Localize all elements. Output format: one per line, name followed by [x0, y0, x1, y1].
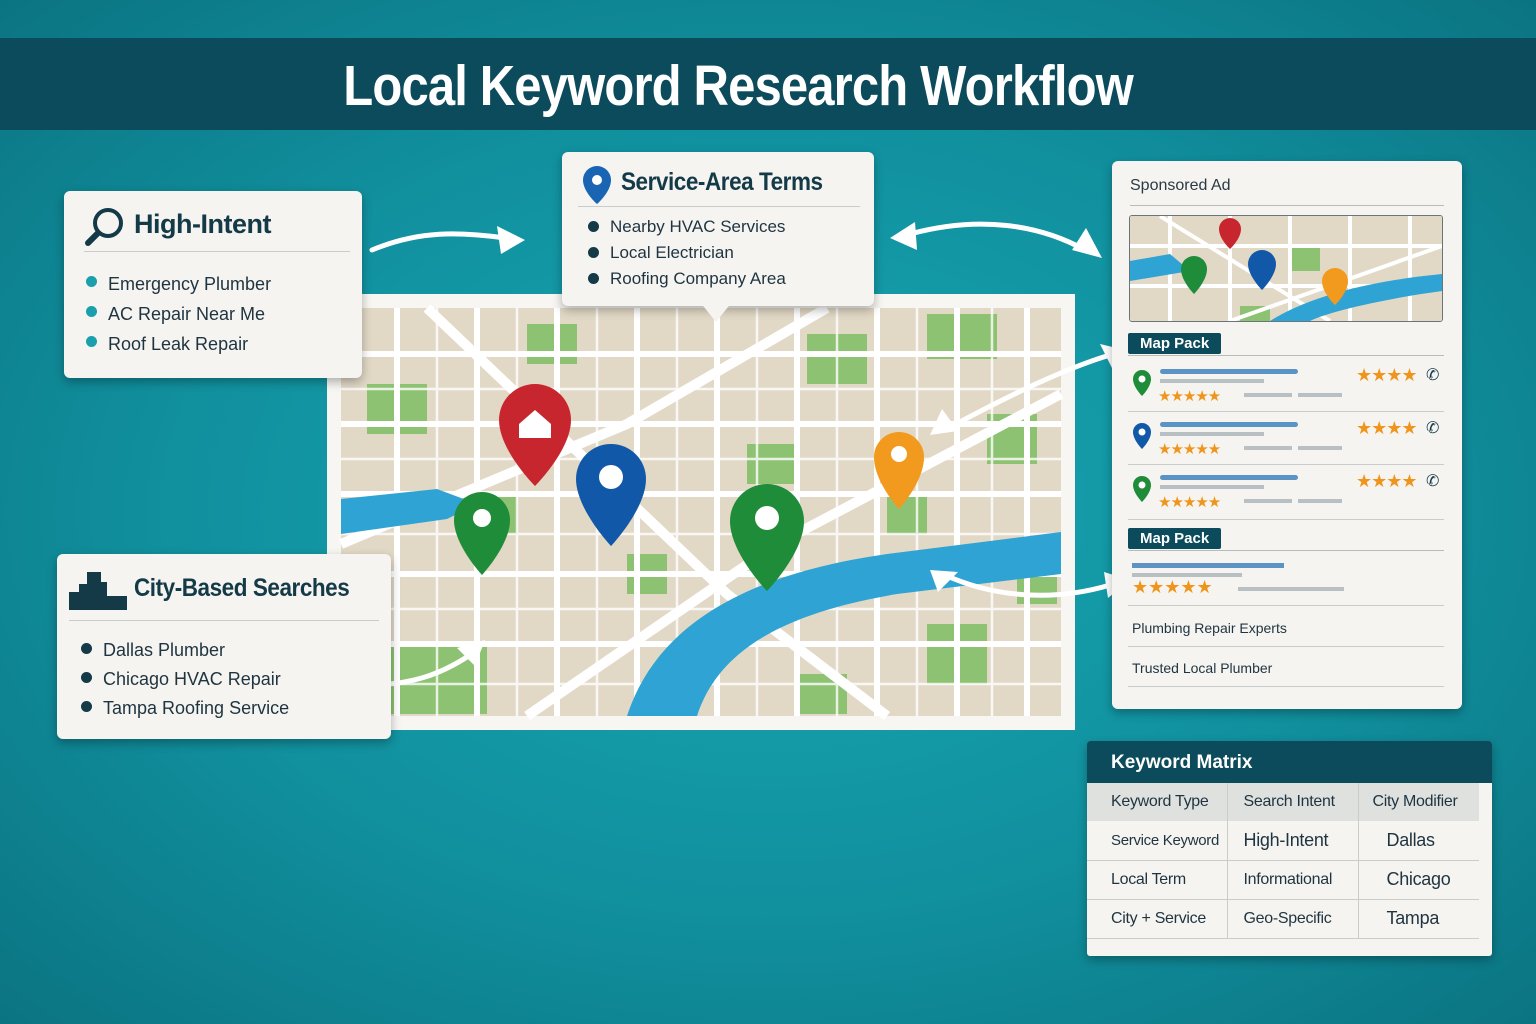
table: keyword matrix: Local Term [1111, 870, 1186, 888]
table: keyword matrix: Dallas [1386, 830, 1435, 850]
panel: sponsored ad SERP: ✆ [1426, 473, 1438, 490]
map pack 2: Map Pack [1140, 530, 1209, 547]
panel: high-intent: AC Repair Near Me [108, 304, 265, 324]
panel: high-intent: Emergency Plumber [108, 274, 271, 294]
panel: sponsored ad SERP: ★★★★★ [1158, 388, 1220, 405]
table: keyword matrix: City + Service [1111, 910, 1206, 926]
table: keyword matrix: Tampa [1386, 908, 1439, 928]
panel: sponsored ad SERP: ★★★★★ [1132, 577, 1213, 597]
panel: sponsored ad SERP: Plumbing Repair Experts [1132, 620, 1287, 636]
panel: high-intent: Roof Leak Repair [108, 334, 248, 354]
table: keyword matrix: City Modifier [1372, 793, 1458, 810]
panel: city-based searches: Dallas Plumber [103, 640, 225, 660]
panel: service-area terms: Local Electrician [610, 243, 734, 262]
table: keyword matrix: High-Intent [1244, 830, 1328, 850]
panel: city-based searches: Chicago HVAC Repair [103, 669, 281, 689]
panel: sponsored ad SERP: ★★★★ [1356, 365, 1417, 385]
panel: sponsored ad SERP: ✆ [1426, 420, 1438, 437]
map pack 1 [1128, 333, 1444, 356]
panel: service-area terms: Roofing Company Area [610, 269, 786, 288]
panel: sponsored ad SERP: ★★★★★ [1158, 494, 1220, 511]
mini map [1129, 215, 1443, 322]
table: keyword matrix: Search Intent [1244, 793, 1335, 810]
panel: sponsored ad SERP: Sponsored Ad [1130, 177, 1231, 194]
panel: sponsored ad SERP: ★★★★ [1356, 418, 1417, 438]
panel: sponsored ad SERP: ★★★★ [1356, 471, 1417, 491]
table: keyword matrix: Informational [1244, 870, 1332, 888]
panel: sponsored ad SERP: Trusted Local Plumber [1132, 660, 1272, 676]
map pack 1: Map Pack [1140, 335, 1209, 352]
panel: sponsored ad SERP: ✆ [1426, 367, 1438, 384]
panel: city-based searches: Tampa Roofing Service [103, 698, 289, 718]
pins [499, 384, 571, 486]
table: keyword matrix: Service Keyword [1111, 832, 1219, 849]
panel: service-area terms: Service-Area Terms [621, 168, 823, 196]
title banner [0, 38, 1536, 130]
panel: service-area terms [562, 152, 874, 306]
panel: sponsored ad SERP [1112, 161, 1462, 709]
table: keyword matrix: Keyword Matrix [1111, 752, 1252, 773]
table: keyword matrix: Chicago [1386, 869, 1450, 889]
table: keyword matrix: Keyword Type [1111, 793, 1208, 810]
panel: service-area terms: Nearby HVAC Services [610, 217, 785, 236]
panel: high-intent [64, 191, 362, 378]
table: keyword matrix [1087, 741, 1492, 956]
panel: city-based searches [57, 554, 391, 739]
map pack 2 [1128, 528, 1444, 551]
panel: high-intent: High-Intent [134, 209, 271, 239]
title banner: Local Keyword Research Workflow [343, 54, 1133, 118]
map [327, 294, 1075, 730]
panel: sponsored ad SERP: ★★★★★ [1158, 441, 1220, 458]
table: keyword matrix: Geo-Specific [1244, 910, 1332, 926]
panel: city-based searches: City-Based Searches [134, 574, 349, 602]
